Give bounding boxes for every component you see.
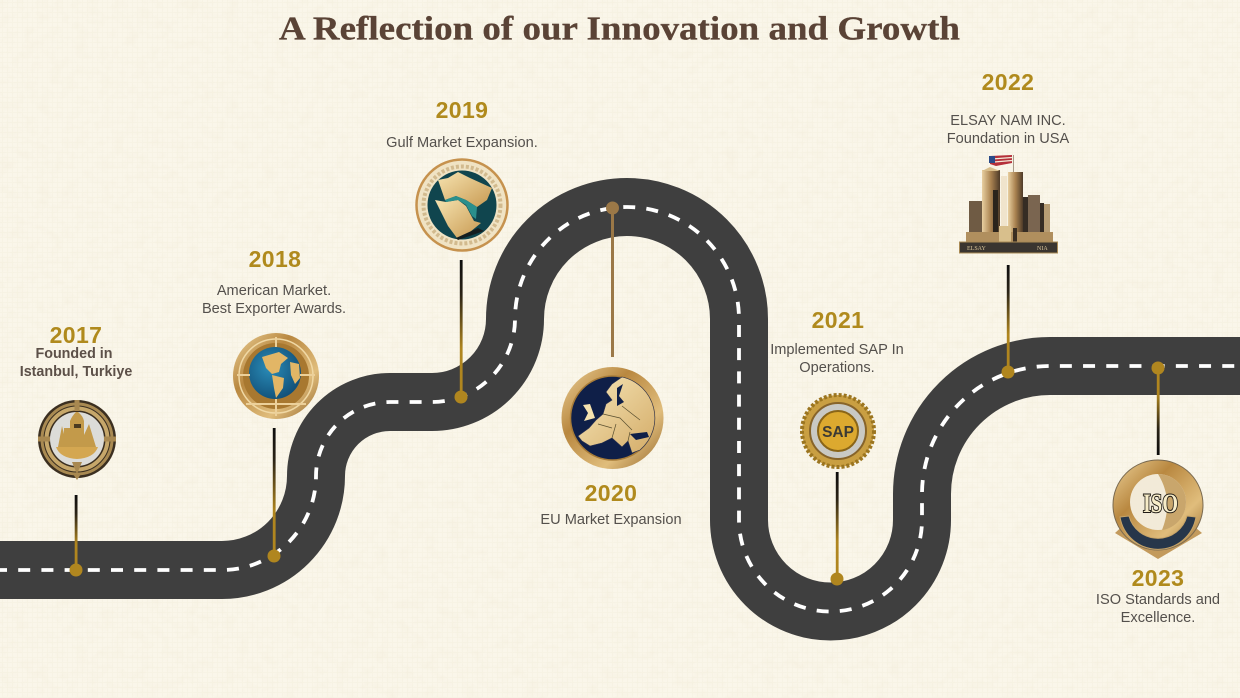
icon: gulf map medallion [416,160,508,250]
milestone 2018 [202,246,346,562]
icon: skyline with flag: NIA [1037,246,1048,252]
icon: skyline with flag [960,155,1058,253]
icon: SAP badge [802,395,874,467]
icon: SAP badge: SAP [822,424,854,441]
icon: globe medallion [233,333,319,419]
description 2018: American Market. [217,283,331,299]
pin 2021 [830,472,844,586]
year 2019: 2019 [436,97,488,123]
description 2021: Operations. [799,360,875,376]
year 2022: 2022 [982,69,1034,95]
year 2017: 2017 [50,322,102,348]
milestone 2020 [540,202,682,528]
icon: skyline with flag: ELSAY [967,246,986,252]
description 2022: Foundation in USA [947,131,1070,147]
year 2018: 2018 [249,246,301,272]
description 2017: Istanbul, Turkiye [20,364,132,380]
icon: city medallion [38,400,116,480]
title: A Reflection of our Innovation and Growth [279,10,960,48]
pin 2020 [606,202,619,357]
pin 2019 [454,260,468,404]
description 2018: Best Exporter Awards. [202,301,346,317]
description 2017: Founded in [35,346,113,362]
milestone 2017 [20,322,132,576]
description 2019: Gulf Market Expansion. [386,135,538,151]
pin 2022 [1002,265,1014,378]
icon: ISO badge: ISO [1143,489,1178,518]
description 2020: EU Market Expansion [540,512,682,528]
description 2022: ELSAY NAM INC. [950,113,1066,129]
milestone 2021 [770,307,904,586]
year 2021: 2021 [812,307,864,333]
year 2023: 2023 [1132,565,1184,591]
icon: europe map medallion [562,367,664,469]
year 2020: 2020 [585,480,637,506]
milestone 2023 [1096,362,1220,626]
icon: ISO badge [1113,460,1203,559]
milestone 2022 [947,69,1070,378]
description 2021: Implemented SAP In [770,342,904,358]
winding road [0,207,1240,612]
pin 2018 [268,428,280,562]
description 2023: Excellence. [1121,610,1195,626]
milestone 2019 [386,97,538,404]
description 2023: ISO Standards and [1096,592,1220,608]
pin 2023 [1152,362,1164,455]
pin 2017 [70,495,82,576]
